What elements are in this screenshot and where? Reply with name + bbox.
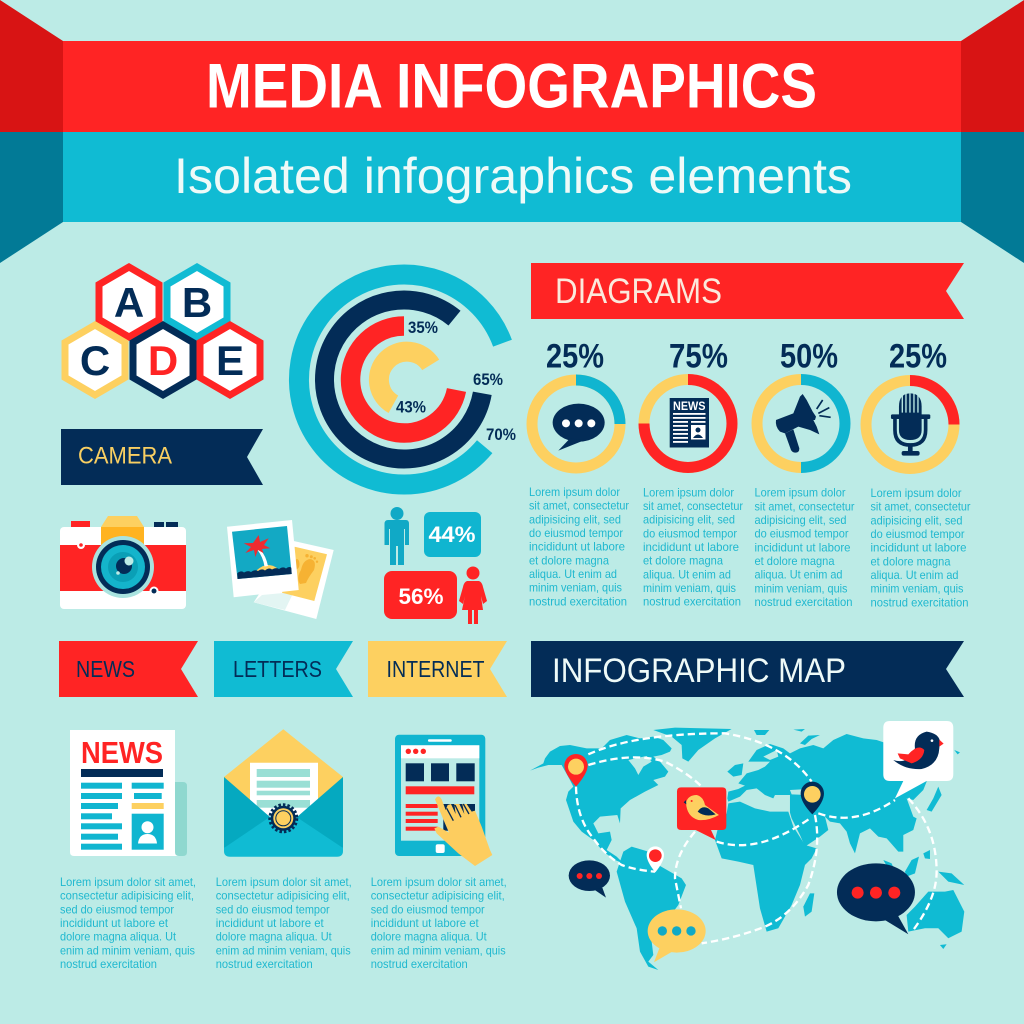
text: diagram column 4 bbox=[870, 487, 971, 609]
title: MEDIA INFOGRAPHICS bbox=[206, 52, 817, 122]
bubble: white with navy bird bbox=[883, 721, 953, 798]
ribbon: infographic map: INFOGRAPHIC MAP bbox=[552, 652, 846, 690]
bubble: yellow bbox=[648, 909, 706, 962]
donut: 50% megaphone bbox=[757, 338, 845, 468]
text: internet column: incididunt ut labore et bbox=[371, 917, 479, 930]
text: news column: dolore magna aliqua. Ut bbox=[60, 931, 177, 944]
text: diagram column 2: adipisicing elit, sed bbox=[643, 514, 735, 527]
donut: 25% microphone bbox=[866, 338, 954, 468]
text: letters column bbox=[216, 876, 352, 971]
bubble: large navy bbox=[837, 863, 915, 934]
text: diagram column 2: Lorem ipsum dolor bbox=[643, 486, 734, 499]
bubble: red with yellow bird bbox=[677, 787, 726, 840]
text: letters column: incididunt ut labore et bbox=[216, 917, 324, 930]
text: diagram column 4: aliqua. Ut enim ad bbox=[870, 569, 958, 582]
text: diagram column 2 bbox=[643, 486, 743, 609]
donut: 50% megaphone: 50% bbox=[780, 338, 838, 376]
text: diagram column 3: minim veniam, quis bbox=[754, 582, 848, 595]
text: diagram column 1: minim veniam, quis bbox=[529, 582, 622, 595]
text: diagram column 2: nostrud exercitation bbox=[643, 596, 741, 609]
pin: red bbox=[564, 754, 588, 787]
donut: 75% news bbox=[644, 338, 732, 468]
ribbon: diagrams bbox=[531, 263, 964, 319]
text: diagram column 3: incididunt ut labore bbox=[754, 541, 850, 554]
donut: 25% chat bbox=[532, 338, 620, 468]
text: diagram column 4: incididunt ut labore bbox=[870, 542, 966, 555]
text: internet column: dolore magna aliqua. Ut bbox=[371, 931, 487, 944]
stat: 44%: 44% bbox=[428, 522, 476, 547]
text: letters column: Lorem ipsum dolor sit amet, bbox=[216, 876, 352, 889]
text: diagram column 4: do eiusmod tempor bbox=[870, 528, 965, 541]
ribbon: news: NEWS bbox=[76, 656, 135, 682]
icon: photos bbox=[227, 520, 334, 619]
text: news column bbox=[60, 876, 196, 971]
ribbon: news bbox=[59, 641, 198, 697]
lakes and inner gaps bbox=[628, 750, 808, 795]
text: diagram column 1: aliqua. Ut enim ad bbox=[529, 568, 617, 581]
header banner bbox=[0, 0, 1024, 263]
icon: newspaper bbox=[70, 730, 187, 856]
text: diagram column 4: minim veniam, quis bbox=[870, 583, 964, 596]
icon: camera bbox=[60, 516, 186, 609]
text: diagram column 2: incididunt ut labore bbox=[643, 541, 739, 554]
text: diagram column 1: do eiusmod tempor bbox=[529, 527, 623, 540]
text: diagram column 2: minim veniam, quis bbox=[643, 582, 736, 595]
text: diagram column 1: et dolore magna bbox=[529, 554, 610, 567]
text: diagram column 2: et dolore magna bbox=[643, 555, 724, 568]
chart percentage labels: 65% bbox=[473, 370, 503, 389]
text: diagram column 3: adipisicing elit, sed bbox=[754, 514, 846, 527]
chart percentage labels: 35% bbox=[408, 318, 438, 337]
ribbon: internet: INTERNET bbox=[386, 656, 484, 682]
text: news column: enim ad minim veniam, quis bbox=[60, 944, 195, 957]
text: diagram column 2: do eiusmod tempor bbox=[643, 527, 737, 540]
text: diagram column 1: sit amet, consectetur bbox=[529, 500, 629, 513]
text: internet column bbox=[371, 876, 507, 971]
ribbon: internet bbox=[368, 641, 507, 697]
text: internet column: Lorem ipsum dolor sit amet, bbox=[371, 876, 507, 889]
pin: white bbox=[647, 846, 664, 872]
text: diagram column 1: adipisicing elit, sed bbox=[529, 513, 621, 526]
donut: 25% microphone: 25% bbox=[889, 338, 947, 376]
text: diagram column 3: do eiusmod tempor bbox=[754, 528, 849, 541]
text: diagram column 3: nostrud exercitation bbox=[754, 596, 852, 609]
text: internet column: sed do eiusmod tempor bbox=[371, 903, 485, 916]
text: diagram column 1: Lorem ipsum dolor bbox=[529, 486, 620, 499]
text: internet column: nostrud exercitation bbox=[371, 958, 468, 971]
icon: woman bbox=[459, 566, 487, 624]
text: news column: nostrud exercitation bbox=[60, 958, 157, 971]
subtitle: Isolated infographics elements bbox=[174, 148, 852, 204]
text: diagram column 2: sit amet, consectetur bbox=[643, 500, 743, 513]
icon: newspaper: NEWS bbox=[81, 735, 163, 770]
text: news column: incididunt ut labore et bbox=[60, 917, 169, 930]
ribbon: camera: CAMERA bbox=[78, 442, 172, 470]
ribbon: diagrams: DIAGRAMS bbox=[555, 272, 722, 311]
text: letters column: nostrud exercitation bbox=[216, 958, 313, 971]
pin: navy bbox=[801, 782, 824, 814]
chart percentage labels bbox=[396, 318, 516, 444]
hexagon letters ABCDE: D bbox=[148, 337, 178, 384]
text: diagram column 1: nostrud exercitation bbox=[529, 595, 627, 608]
hand bbox=[434, 796, 492, 866]
text: diagram column 3: et dolore magna bbox=[754, 555, 835, 568]
text: diagram column 3: Lorem ipsum dolor bbox=[754, 487, 846, 500]
text: diagram column 4: sit amet, consectetur bbox=[870, 501, 971, 514]
donut: 25% chat: 25% bbox=[546, 338, 604, 376]
icon: tablet with hand bbox=[395, 735, 492, 866]
text: internet column: enim ad minim veniam, quis bbox=[371, 944, 506, 957]
text: news column: Lorem ipsum dolor sit amet, bbox=[60, 876, 196, 889]
ribbon: camera bbox=[61, 429, 263, 485]
donut: 75% news: 75% bbox=[669, 338, 728, 376]
text: diagram column 3: sit amet, consectetur bbox=[754, 500, 855, 513]
text: news column: sed do eiusmod tempor bbox=[60, 903, 174, 916]
text: letters column: consectetur adipisicing elit, bbox=[216, 890, 350, 903]
text: diagram column 3: aliqua. Ut enim ad bbox=[754, 569, 842, 582]
hexagon letters ABCDE: C bbox=[80, 337, 110, 384]
text: letters column: sed do eiusmod tempor bbox=[216, 903, 330, 916]
text: letters column: enim ad minim veniam, quis bbox=[216, 944, 351, 957]
continents bbox=[530, 728, 964, 970]
text: diagram column 1 bbox=[529, 486, 629, 608]
text: diagram column 4: nostrud exercitation bbox=[870, 596, 968, 609]
text: diagram column 4: Lorem ipsum dolor bbox=[870, 487, 962, 500]
hexagon letters ABCDE bbox=[65, 267, 260, 395]
text: internet column: consectetur adipisicing elit, bbox=[371, 890, 505, 903]
text: diagram column 1: incididunt ut labore bbox=[529, 541, 625, 554]
gender statistics bbox=[384, 507, 487, 624]
chart percentage labels: 43% bbox=[396, 398, 426, 416]
ribbon: letters bbox=[214, 641, 353, 697]
text: diagram column 2: aliqua. Ut enim ad bbox=[643, 568, 731, 581]
chart percentage labels: 70% bbox=[486, 425, 516, 444]
donut: 75% news: NEWS bbox=[673, 401, 706, 413]
ribbon: letters: LETTERS bbox=[233, 656, 322, 682]
ribbon: infographic map bbox=[531, 641, 964, 697]
icon: envelope bbox=[224, 729, 343, 857]
text: news column: consectetur adipisicing elit, bbox=[60, 890, 194, 903]
hexagon letters ABCDE: B bbox=[182, 279, 212, 326]
icon: man bbox=[384, 507, 409, 565]
world map bbox=[530, 721, 964, 970]
hexagon letters ABCDE: E bbox=[216, 337, 244, 384]
seal bbox=[270, 805, 297, 832]
text: diagram column 4: et dolore magna bbox=[870, 555, 951, 568]
stat: 56%: 56% bbox=[398, 584, 444, 609]
dashed routes bbox=[576, 733, 937, 943]
text: diagram column 3 bbox=[754, 487, 855, 609]
concentric radial chart bbox=[299, 275, 516, 485]
text: diagram column 4: adipisicing elit, sed bbox=[870, 514, 962, 527]
bubble: small navy bbox=[569, 860, 610, 898]
text: letters column: dolore magna aliqua. Ut bbox=[216, 931, 332, 944]
hexagon letters ABCDE: A bbox=[114, 279, 144, 326]
